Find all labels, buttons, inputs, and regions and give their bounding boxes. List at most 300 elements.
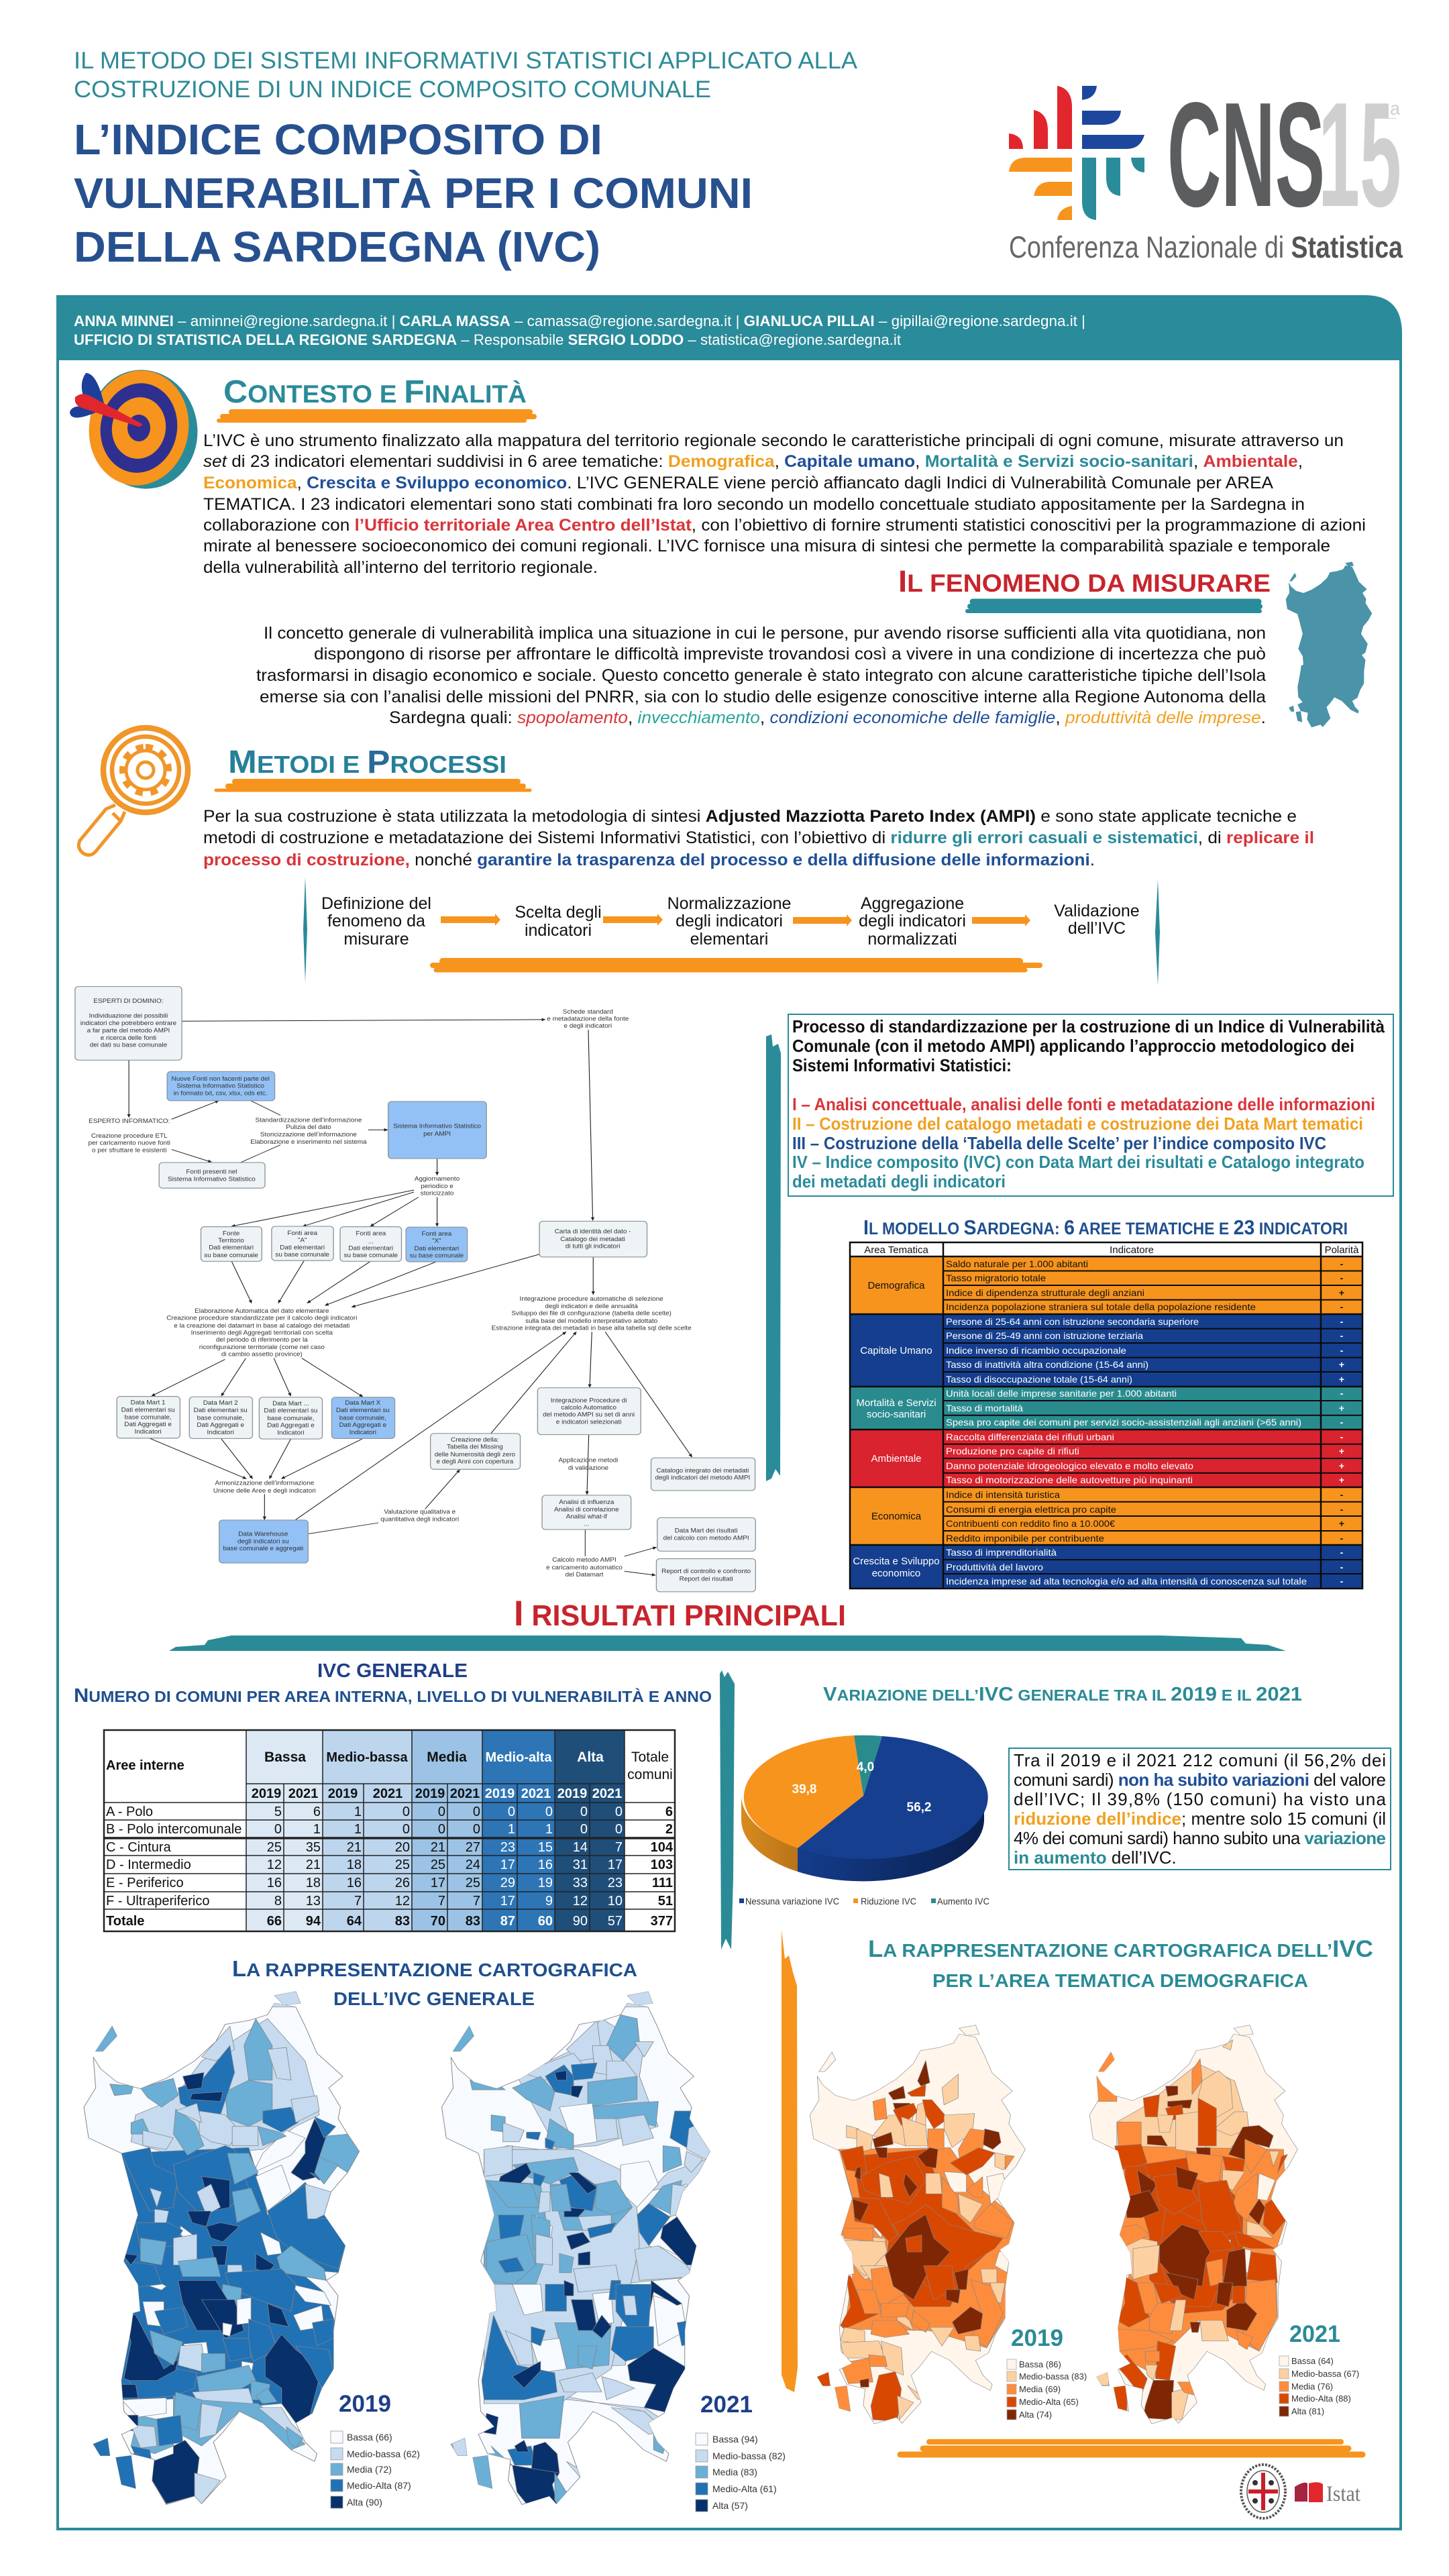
numbers, light columns: 60 xyxy=(538,1914,553,1929)
heading: numero di comuni: NUMERO DI COMUNI PER AREA INTERNA, LIVELLO DI VULNERABILITÀ E ANNO xyxy=(74,1685,712,1707)
map: IVC generale 2021 xyxy=(441,1990,724,2508)
numbers, light columns: 17 xyxy=(500,1858,515,1872)
polarity: + xyxy=(1339,1359,1344,1370)
labels: del metodo AMPI su set di anni xyxy=(543,1411,635,1417)
polarity: - xyxy=(1340,1417,1344,1428)
indicators: Danno potenziale idrogeologico elevato e molto elevato xyxy=(946,1460,1193,1471)
brush: teal vertical divider xyxy=(766,1034,781,1481)
polarity: - xyxy=(1340,1273,1344,1283)
polarity: + xyxy=(1339,1460,1344,1471)
heading: variazione IVC: VARIAZIONE DELL’ IVC GENERALE TRA IL 2019 E IL 2021 xyxy=(823,1684,1302,1705)
arrows xyxy=(129,1020,692,1575)
row labels: D - Intermedio xyxy=(106,1858,191,1872)
step labels: fenomeno da xyxy=(327,912,425,930)
labels: e indicatori selezionati xyxy=(556,1418,621,1426)
step labels: dell’IVC xyxy=(1068,919,1126,938)
numbers, light columns: 1 xyxy=(508,1822,515,1837)
labels: base comunale, xyxy=(339,1414,386,1421)
labels: Analisi di influenza xyxy=(559,1498,614,1505)
area labels: Mortalità e Servizi xyxy=(856,1397,936,1409)
numbers, light columns: 1 xyxy=(545,1822,553,1837)
numbers, light columns: 24 xyxy=(466,1858,480,1872)
labels: Nuove Fonti non facenti parte del xyxy=(172,1075,270,1082)
right bracket xyxy=(1155,879,1160,985)
area labels: economico xyxy=(872,1568,920,1579)
numbers, light columns: 12 xyxy=(267,1858,282,1872)
labels: in formato txt, csv, xlsx, ods etc. xyxy=(174,1089,268,1096)
step labels: misurare xyxy=(343,930,409,949)
step labels: Scelta degli xyxy=(515,903,602,922)
map: area demografica 2019 xyxy=(810,2025,1025,2424)
labels: del calcolo con metodo AMPI xyxy=(663,1534,749,1541)
year headers: 2019 xyxy=(485,1786,515,1801)
labels: Analisi what-if xyxy=(566,1513,607,1519)
labels: Storicizzazione dell’informazione xyxy=(260,1131,357,1138)
callout: variation text: dell’IVC; Il 39,8% (150 comuni) ha visto una xyxy=(1014,1789,1387,1809)
brush under steps xyxy=(433,961,1040,970)
icon: target with dart xyxy=(70,360,209,499)
labels: Creazione procedure standardizzate per il calcolo degli indicatori xyxy=(166,1314,357,1322)
legend: map 2021: Media (83) xyxy=(712,2467,757,2477)
icon: Sardinia silhouette xyxy=(1286,562,1372,727)
labels: Fonte xyxy=(223,1230,239,1236)
text block: contesto e finalità: mirate al benessere socioeconomico dei comuni regionali. L’IVC fornisce una misura di sintesi che permette la comparabilità spaziale e temporale xyxy=(203,537,1330,555)
logo: Istat: Istat xyxy=(1326,2482,1360,2506)
numbers, light columns: 5 xyxy=(274,1805,282,1819)
callout: variation text: Tra il 2019 e il 2021 212 comuni (il 56,2% dei xyxy=(1014,1750,1386,1770)
labels: Report di controllo e confronto xyxy=(661,1568,751,1574)
numbers, light columns: 1 xyxy=(313,1822,321,1837)
labels: Sviluppo dei file di configurazione (tabella delle scelte) xyxy=(511,1309,672,1317)
row labels: B - Polo intercomunale xyxy=(106,1822,241,1837)
labels: "X" xyxy=(432,1237,441,1244)
table header: Indicatore xyxy=(1110,1244,1154,1256)
year headers: 2021 xyxy=(450,1786,480,1801)
labels: sulla base del modello interpretativo adottato xyxy=(525,1317,657,1324)
brush: teal vertical divider xyxy=(720,1670,735,1949)
indicators: Unità locali delle imprese sanitarie per 1.000 abitanti xyxy=(946,1388,1177,1399)
brush: teal under fenomeno xyxy=(967,602,1260,611)
table header xyxy=(850,1242,1362,1256)
callout: variation text: 4% dei comuni sardi) hanno subito una variazione xyxy=(1014,1828,1386,1848)
heading: Metodi e Processi: METODI E PROCESSI xyxy=(228,745,506,780)
indicators: Contribuenti con reddito fino a 10.000€ xyxy=(946,1518,1115,1529)
heading: rappresentazione cartografica demografica xyxy=(868,1936,1373,1991)
intro text: Sistemi Informativi Statistici: xyxy=(792,1055,1012,1075)
legend: demografica 2019 xyxy=(1007,2359,1087,2420)
labels: Fonti presenti nel xyxy=(186,1168,237,1175)
labels: o per sfruttare le esistenti xyxy=(92,1146,166,1154)
indicators: Produttività del lavoro xyxy=(946,1562,1043,1572)
numbers, light columns: 103 xyxy=(651,1858,673,1872)
legend: map 2019: Bassa (66) xyxy=(347,2432,392,2443)
polarity: - xyxy=(1340,1562,1344,1572)
pie legend xyxy=(739,1896,989,1907)
logo 15a xyxy=(1318,72,1403,238)
logo caption: Conferenza Nazionale di Statistica xyxy=(1009,230,1403,264)
polarity: + xyxy=(1339,1287,1344,1298)
labels: Dati Aggregati e xyxy=(197,1421,244,1428)
labels: e metadatazione della fonte xyxy=(547,1015,629,1022)
panel: authors header band: ANNA MINNEI – aminnei@regione.sardegna.it | CARLA MASSA – camassa@regione.sardegna.it | GIANLUCA PILLAI – gipillai@regione.sardegna.it | xyxy=(74,313,1085,329)
numbers, light columns: 17 xyxy=(500,1894,515,1909)
text block: contesto e finalità: della vulnerabilità all’interno del territorio regionale. xyxy=(203,558,598,577)
logo 15a: a xyxy=(1390,98,1400,119)
text block: il fenomeno da misurare: emerse sia con l’analisi delle missioni del PNRR, sia con lo studio delle esigenze conoscitive interne alla Regione Autonoma della xyxy=(260,688,1266,706)
numbers, light columns: 13 xyxy=(306,1894,321,1909)
polarity: - xyxy=(1340,1316,1344,1327)
heading: rappresentazione cartografica generale: DELL’IVC GENERALE xyxy=(333,1988,535,2009)
text block: il fenomeno da misurare: trasformarsi in disagio economico e sociale. Questo concetto generale è stato integrato con alcune caratteristiche tipiche dell’Isola xyxy=(256,666,1266,685)
legend: demografica 2019: Medio-bassa (83) xyxy=(1019,2371,1087,2381)
numbers, light columns: 25 xyxy=(395,1858,410,1872)
numbers, light columns: 104 xyxy=(651,1840,674,1855)
steps list xyxy=(792,1094,1375,1191)
colour bands xyxy=(850,1256,1362,1589)
text block: contesto e finalità: collaborazione con l’Ufficio territoriale Area Centro dell’Istat , con l’obiettivo di fornire strumenti statistici conoscitivi per la programmazione di azioni xyxy=(203,516,1366,535)
labels: e degli indicatori xyxy=(564,1022,612,1029)
process flow xyxy=(303,877,1160,985)
text block: il fenomeno da misurare: dispongono di risorse per affrontare le difficoltà impreviste trovandosi così a vivere in una condizione di incertezza che può xyxy=(314,645,1266,663)
numbers, light columns: 21 xyxy=(347,1840,362,1855)
indicators: Indice di dipendenza strutturale degli anziani xyxy=(946,1287,1144,1298)
indicators: Saldo naturale per 1.000 abitanti xyxy=(946,1258,1088,1269)
steps list: dei metadati degli indicatori xyxy=(792,1171,1006,1191)
column headers: Medio-bassa xyxy=(326,1750,408,1765)
pie legend: Aumento IVC xyxy=(937,1896,989,1907)
labels: Elaborazione Automatica del dato elementare xyxy=(195,1307,329,1314)
numbers, light columns: 12 xyxy=(395,1894,410,1909)
legend: map 2019: Alta (90) xyxy=(347,2497,382,2508)
numbers, light columns: 0 xyxy=(545,1805,553,1819)
brush: orange vertical divider xyxy=(782,1930,798,2392)
year headers: 2019 xyxy=(415,1786,445,1801)
numbers, light columns: 1 xyxy=(354,1822,362,1837)
legend: map 2021: Alta (57) xyxy=(712,2500,748,2511)
year headers: 2019 xyxy=(252,1786,281,1801)
text block: il fenomeno da misurare: Sardegna quali: spopolamento , invecchiamento , condizioni economiche delle famiglie , produttività delle imprese . xyxy=(389,708,1266,727)
legend: map 2019: Medio-Alta (87) xyxy=(347,2480,411,2491)
labels: su base comunale xyxy=(275,1251,329,1258)
labels: Fonti area xyxy=(422,1230,452,1237)
year label 2021: 2021 xyxy=(700,2392,753,2418)
numbers, light columns: 25 xyxy=(431,1858,445,1872)
numbers, light columns: 16 xyxy=(538,1858,553,1872)
legend: map 2019: Medio-bassa (62) xyxy=(347,2449,420,2459)
underlay areas xyxy=(839,2115,1015,2348)
indicators: Spesa pro capite dei comuni per servizi socio-assistenziali agli anziani (>65 anni) xyxy=(946,1417,1301,1428)
polarity: + xyxy=(1339,1374,1344,1385)
row header title: Aree interne xyxy=(106,1758,184,1773)
pie legend: Riduzione IVC xyxy=(861,1896,916,1907)
heading: rappresentazione cartografica demografica: LA RAPPRESENTAZIONE CARTOGRAFICA DELL’ IVC xyxy=(868,1936,1373,1962)
text block: contesto e finalità: L’IVC è uno strumento finalizzato alla mappatura del territorio regionale secondo le caratteristiche principali di ogni comune, misurate attraverso un xyxy=(203,431,1344,450)
polarity: - xyxy=(1340,1547,1344,1558)
callout: variation text xyxy=(1009,1748,1391,1870)
area labels xyxy=(853,1280,940,1579)
legend: map 2019: Media (72) xyxy=(347,2464,392,2475)
pie top: nessuna variazione xyxy=(798,1736,988,1859)
area labels: Capitale Umano xyxy=(860,1345,932,1356)
text block: il fenomeno da misurare xyxy=(256,624,1266,727)
numbers, light columns: 111 xyxy=(652,1876,673,1890)
labels: Standardizzazione dell’informazione xyxy=(255,1116,362,1123)
labels: Data Mart 2 xyxy=(203,1399,238,1406)
labels: periodico e xyxy=(421,1183,453,1189)
year label 2019: 2019 xyxy=(339,2391,391,2417)
labels: ESPERTI DI DOMINIO: xyxy=(93,998,163,1004)
indicators: Tasso migratorio totale xyxy=(946,1273,1046,1283)
text block: metodi e processi xyxy=(203,807,1314,869)
numbers, light columns: 25 xyxy=(466,1876,480,1890)
labels: Pulizia del dato xyxy=(286,1124,331,1130)
labels: di tutti gli indicatori xyxy=(566,1242,620,1249)
underlay areas xyxy=(484,2020,706,2420)
heading: IVC generale: IVC GENERALE xyxy=(317,1660,468,1682)
labels: Creazione della: xyxy=(451,1436,499,1443)
text block: contesto e finalità: TEMATICA. I 23 indicatori elementari sono stati combinati fra loro secondo un modello concettuale studiato appositamente per la Sardegna in xyxy=(203,495,1305,514)
labels: indicatori che potrebbero entrare xyxy=(80,1020,176,1026)
numbers, light columns: 66 xyxy=(267,1914,282,1929)
numbers, light columns: 21 xyxy=(306,1858,321,1872)
numbers, light columns: 12 xyxy=(573,1894,588,1909)
column headers: Totale xyxy=(631,1750,669,1765)
labels: Report dei risultati xyxy=(680,1575,733,1582)
column headers: Bassa xyxy=(264,1750,306,1765)
legend: map 2021 xyxy=(696,2433,786,2512)
numbers, light columns: 18 xyxy=(306,1876,321,1890)
polarity: - xyxy=(1340,1432,1344,1442)
polarity: + xyxy=(1339,1474,1344,1485)
column headers: Medio-alta xyxy=(486,1750,552,1765)
numbers, light columns: 51 xyxy=(658,1894,673,1909)
heading: rappresentazione cartografica demografica: PER L’AREA TEMATICA DEMOGRAFICA xyxy=(932,1970,1308,1991)
numbers, light columns: 94 xyxy=(306,1914,321,1929)
labels: Indicatori xyxy=(207,1429,234,1436)
numbers, light columns: 16 xyxy=(347,1876,362,1890)
labels: Dati elementari xyxy=(209,1244,254,1251)
numbers, light columns: 70 xyxy=(431,1914,445,1929)
row labels: F - Ultraperiferico xyxy=(106,1894,209,1909)
labels: Data Mart 1 xyxy=(131,1399,166,1405)
title xyxy=(74,115,753,271)
text block: metodi e processi: processo di costruzione, nonché garantire la trasparenza del processo e della diffusione delle informazioni . xyxy=(203,851,1095,869)
arrows xyxy=(441,914,1030,926)
year headers: 2021 xyxy=(288,1786,318,1801)
text block: il fenomeno da misurare: Il concetto generale di vulnerabilità implica una situazione in cui le persone, pur avendo risorse sufficienti alla vita quotidiana, non xyxy=(264,624,1266,643)
numbers, light columns: 0 xyxy=(473,1822,480,1837)
connectors xyxy=(241,1101,585,1556)
numbers, light columns: 17 xyxy=(608,1858,623,1872)
labels: del periodo di riferimento per la xyxy=(216,1336,309,1343)
polarity: - xyxy=(1340,1533,1344,1544)
labels: Fonti area xyxy=(287,1230,318,1236)
numbers, light columns: 16 xyxy=(267,1876,282,1890)
area labels: Economica xyxy=(871,1511,922,1522)
labels: Data Mart X xyxy=(345,1399,381,1406)
labels: ... xyxy=(584,1520,589,1527)
numbers, light columns: 14 xyxy=(573,1840,588,1855)
labels: Data Mart ... xyxy=(272,1400,309,1407)
labels: di validazione xyxy=(568,1464,608,1471)
labels: Fonti area xyxy=(356,1230,386,1236)
pie labels: 39,8 xyxy=(792,1782,816,1796)
table header: Polarità xyxy=(1325,1244,1359,1256)
numbers, light columns: 15 xyxy=(538,1840,553,1855)
labels: delle Numerosità degli zero xyxy=(435,1450,515,1458)
numbers, light columns: 377 xyxy=(651,1914,673,1929)
step labels: indicatori xyxy=(525,921,592,940)
legend: demografica 2021: Alta (81) xyxy=(1291,2406,1324,2416)
row labels: C - Cintura xyxy=(106,1840,172,1855)
heading: rappresentazione cartografica generale xyxy=(232,1956,637,2009)
numbers, light columns: 2 xyxy=(665,1822,673,1837)
callout: variation text: in aumento dell’IVC. xyxy=(1014,1847,1177,1868)
labels: Sistema Informativo Statistico xyxy=(393,1122,481,1129)
labels: Catalogo dei metadati xyxy=(560,1235,625,1242)
labels: Estrazione integrata dei metadati in base alla tabella sql delle scelte xyxy=(492,1324,692,1331)
year label orange 2021: 2021 xyxy=(1289,2321,1340,2347)
polarity: + xyxy=(1339,1403,1344,1413)
labels: Valutazione qualitativa e xyxy=(384,1508,455,1515)
numbers, light columns: 64 xyxy=(347,1914,362,1929)
indicators: Produzione pro capite di rifiuti xyxy=(946,1446,1079,1456)
labels: ESPERTO INFORMATICO: xyxy=(89,1118,170,1124)
step labels xyxy=(321,894,1140,949)
row labels: E - Periferico xyxy=(106,1876,184,1890)
table header: Area Tematica xyxy=(864,1244,928,1256)
numbers, light columns: 0 xyxy=(274,1822,282,1837)
numbers, light columns: 90 xyxy=(573,1914,588,1929)
heading: Il modello Sardegna: IL MODELLO SARDEGNA: 6 AREE TEMATICHE E 23 INDICATORI xyxy=(863,1216,1348,1239)
labels: per caricamento nuove fonti xyxy=(89,1139,170,1146)
column headers: comuni xyxy=(627,1767,673,1782)
brush: orange under Metodi xyxy=(216,782,530,790)
numbers, light columns: 6 xyxy=(665,1805,673,1819)
indicators: Incidenza popolazione straniera sul totale della popolazione residente xyxy=(946,1301,1256,1312)
map: IVC generale 2019 xyxy=(84,1990,360,2504)
callout: variation text: riduzione dell’indice; mentre solo 15 comuni (il xyxy=(1014,1809,1386,1829)
indicators: Persone di 25-49 anni con istruzione terziaria xyxy=(946,1330,1143,1341)
boxes xyxy=(75,987,755,1592)
year headers: 2021 xyxy=(373,1786,402,1801)
labels: Dati elementari xyxy=(348,1244,393,1251)
labels: Tabella dei Missing xyxy=(447,1443,503,1450)
numbers, light columns: 17 xyxy=(431,1876,445,1890)
polarity: - xyxy=(1340,1345,1344,1356)
row labels xyxy=(106,1805,241,1929)
labels: Data Mart dei risultati xyxy=(675,1527,738,1534)
labels: degli indicatori e delle annualità xyxy=(545,1303,639,1309)
labels: Schede standard xyxy=(563,1008,613,1015)
legend: map 2021: Medio-bassa (82) xyxy=(712,2451,786,2461)
indicators: Indice inverso di ricambio occupazionale xyxy=(946,1345,1126,1356)
legend: map 2021: Medio-Alta (61) xyxy=(712,2483,777,2494)
labels: Aggiornamento xyxy=(415,1175,460,1182)
title: VULNERABILITÀ PER I COMUNI xyxy=(74,169,753,217)
labels: Data Warehouse xyxy=(238,1530,288,1537)
numbers, light columns: 0 xyxy=(615,1805,623,1819)
indicators: Incidenza imprese ad alta tecnologia e/o ad alta intensità di conoscenza sul totale xyxy=(946,1576,1307,1587)
polarity: + xyxy=(1339,1518,1344,1529)
pie legend: Nessuna variazione IVC xyxy=(745,1896,839,1907)
steps list: II – Costruzione del catalogo metadati e costruzione dei Data Mart tematici xyxy=(792,1114,1363,1134)
numbers, light columns: 0 xyxy=(473,1805,480,1819)
labels: base comunale, xyxy=(267,1414,314,1421)
indicators: Tasso di imprenditorialità xyxy=(946,1547,1057,1558)
row labels: A - Polo xyxy=(106,1805,153,1819)
year headers: 2019 xyxy=(328,1786,358,1801)
text block: metodi e processi: metodi di costruzione e metadatazione dei Sistemi Informativi Statistici, con l’obiettivo di ridurre gli errori casuali e sistematici , di replicare il xyxy=(203,828,1314,847)
icon: magnifier with gear xyxy=(78,728,188,855)
numbers, light columns: 0 xyxy=(402,1822,410,1837)
intro text xyxy=(792,1016,1385,1075)
labels: Analisi di correlazione xyxy=(554,1506,619,1513)
year label orange 2019: 2019 xyxy=(1011,2325,1063,2351)
labels: e ricerca delle fonti xyxy=(101,1034,156,1041)
text block: contesto e finalità: Economica, Crescita e Sviluppo economico . L’IVC GENERALE viene perciò affiancato dagli Indici di Vulnerabilità Comunale per AREA xyxy=(203,474,1273,492)
pie top: aumento xyxy=(854,1735,882,1796)
year headers: 2019 xyxy=(557,1786,587,1801)
flow chart: SIS methodology xyxy=(75,987,755,1592)
column headers xyxy=(264,1750,673,1782)
table fills xyxy=(104,1730,675,1931)
labels: Dati Aggregati e xyxy=(267,1421,315,1428)
text block: contesto e finalità: set di 23 indicatori elementari suddivisi in 6 aree tematiche: Demografica , Capitale umano , Mortalità e Servizi socio-sanitari , Ambientale , xyxy=(203,452,1303,471)
pie labels: 56,2 xyxy=(907,1801,931,1815)
numbers, light columns: 10 xyxy=(608,1894,623,1909)
labels: Dati elementari su xyxy=(121,1406,175,1413)
labels: quantitativa degli indicatori xyxy=(380,1515,459,1523)
subtitle: IL METODO DEI SISTEMI INFORMATIVI STATISTICI APPLICATO ALLA xyxy=(74,48,858,74)
step labels: degli indicatori xyxy=(676,912,783,930)
numbers, light columns: 19 xyxy=(538,1876,553,1890)
labels: Creazione procedure ETL xyxy=(91,1132,168,1139)
legend: demografica 2021: Bassa (64) xyxy=(1291,2356,1334,2366)
column headers: Alta xyxy=(577,1750,604,1765)
labels: Armonizzazione dell’informazione xyxy=(215,1479,314,1487)
labels: base comunale, xyxy=(125,1413,172,1421)
numbers, light columns: 27 xyxy=(466,1840,480,1855)
polarity: - xyxy=(1340,1489,1344,1500)
heading: Contesto e Finalità: CONTESTO E FINALITÀ xyxy=(223,374,527,410)
numbers, light columns: 21 xyxy=(431,1840,445,1855)
numbers, light columns: 23 xyxy=(608,1876,623,1890)
indicators: Tasso di disoccupazione totale (15-64 anni) xyxy=(946,1374,1132,1385)
labels: degli indicatori su xyxy=(237,1538,289,1544)
labels: Sistema Informativo Statistico xyxy=(168,1175,256,1182)
labels: storicizzato xyxy=(421,1189,453,1197)
numbers, light columns: 18 xyxy=(347,1858,362,1872)
legend: demografica 2021: Medio-bassa (67) xyxy=(1291,2369,1359,2379)
step labels: elementari xyxy=(690,930,768,949)
labels: Sistema Informativo Statistico xyxy=(176,1082,264,1089)
step labels: Validazione xyxy=(1054,902,1140,920)
labels: Dati elementari su xyxy=(264,1407,317,1414)
labels xyxy=(80,998,751,1582)
labels: Catalogo integrato dei metadati xyxy=(656,1466,749,1474)
labels: base comunale e aggregati xyxy=(223,1545,303,1552)
legend: demografica 2019: Media (69) xyxy=(1019,2384,1061,2394)
pie side xyxy=(741,1796,798,1872)
title: L’INDICE COMPOSITO DI xyxy=(74,115,602,164)
labels: Dati elementari xyxy=(280,1244,325,1251)
numbers, light columns: 57 xyxy=(608,1914,623,1929)
labels: a far parte del metodo AMPI xyxy=(87,1027,170,1034)
panel: authors header band xyxy=(58,297,1401,360)
text block: metodi e processi: Per la sua costruzione è stata utilizzata la metodologia di sintesi Adjusted Mazziotta Pareto Index (AMPI) e sono state applicate tecniche e xyxy=(203,807,1297,826)
indicators: Raccolta differenziata dei rifiuti urbani xyxy=(946,1432,1114,1442)
